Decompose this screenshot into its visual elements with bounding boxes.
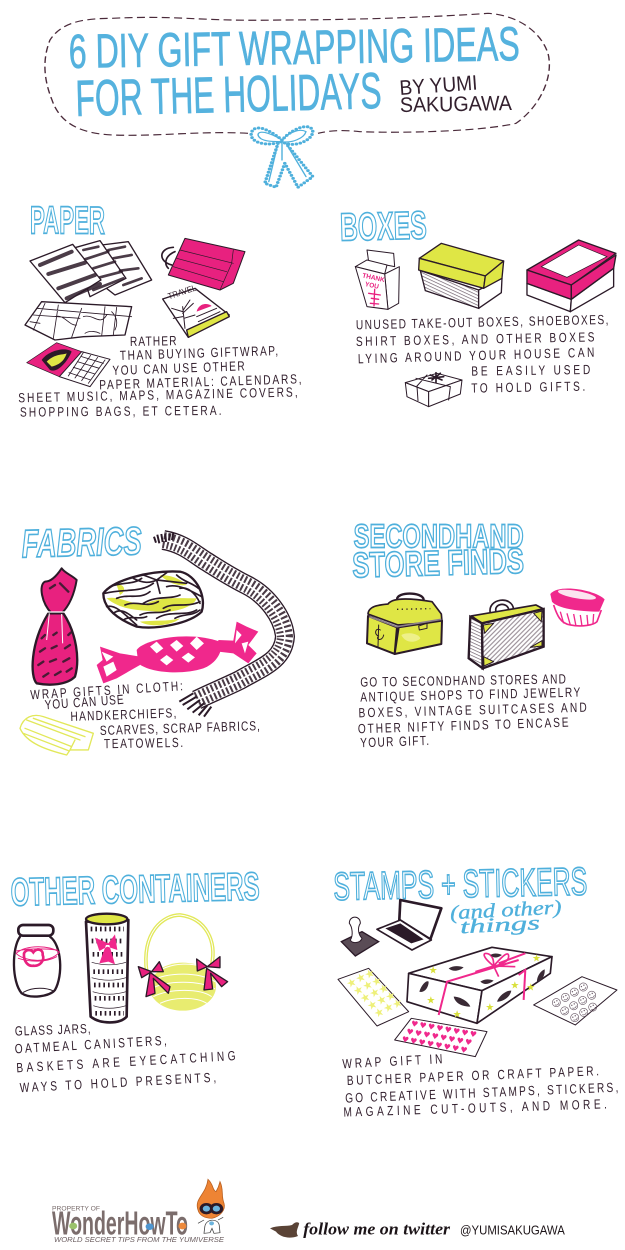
- text block: stamps: BUTCHER PAPER OR CRAFT PAPER.: [347, 1063, 599, 1088]
- byline: [399, 72, 512, 117]
- heading: fabrics: FABRICS: [21, 519, 142, 566]
- text block: other containers: OATMEAL CANISTERS,: [14, 1032, 167, 1057]
- illustration: yellow train case: [367, 594, 442, 654]
- illustration: smiley sticker sheet: [534, 977, 617, 1026]
- text block: fabrics: [30, 678, 260, 752]
- logo: WonderHowTo: [52, 1204, 225, 1244]
- text block: stamps: MAGAZINE CUT-OUTS, AND MORE.: [343, 1096, 607, 1120]
- illustration: take-out box: THANK: [362, 272, 385, 284]
- text block: stamps: WRAP GIFT IN: [342, 1051, 443, 1072]
- illustration: yellow tea towel: [20, 715, 93, 755]
- icon: blue ribbon bow: [251, 127, 313, 187]
- byline: SAKUGAWA: [400, 92, 512, 117]
- text block: fabrics: SCARVES, SCRAP FABRICS,: [100, 718, 260, 738]
- logo: WonderHowTo: WORLD SECRET TIPS FROM THE YUMIVERSE: [54, 1236, 225, 1244]
- illustration: travel magazine: [163, 283, 229, 337]
- illustration: yellow basket with bows: [138, 915, 228, 1011]
- icon: bird: [270, 1222, 299, 1238]
- illustration: yellow star sticker sheet: ★★★★★: [361, 965, 406, 1012]
- illustration: laptop: [377, 900, 441, 950]
- panel: other containers: [10, 865, 260, 1096]
- illustration: pink oval box: [550, 588, 605, 626]
- panel: secondhand store finds: [352, 518, 605, 751]
- byline: BY YUMI: [399, 72, 478, 100]
- illustration: wrapped gift with ribbon: [407, 947, 552, 1023]
- illustration: pink heart sticker sheet: ♥♥♥♥♥♥♥♥: [410, 1019, 479, 1040]
- panel: fabrics: [20, 519, 285, 755]
- text block: other containers: BASKETS ARE EYECATCHING: [16, 1048, 236, 1076]
- twitter follow line: @YUMISAKUGAWA: [460, 1224, 565, 1238]
- text block: paper: YOU CAN USE OTHER: [112, 358, 245, 378]
- illustration: pink shopping bag: [162, 238, 245, 290]
- text block: fabrics: HANDKERCHIEFS,: [70, 705, 177, 724]
- text block: other containers: [14, 1021, 236, 1096]
- illustration: pink heart sticker sheet: ♥♥♥♥♥♥♥♥: [401, 1035, 469, 1055]
- text block: other containers: WAYS TO HOLD PRESENTS,: [19, 1069, 216, 1096]
- illustration: folded map: [25, 302, 132, 340]
- dashed speech bubble outline: [45, 13, 549, 135]
- illustration: wrapped gift with ribbon: ★: [532, 954, 541, 965]
- illustration: wrapped gift with ribbon: ★: [453, 1009, 462, 1020]
- illustration: smiley sticker sheet: ☺☺☺☺: [558, 989, 600, 1019]
- illustration: pink box: [527, 240, 616, 312]
- illustration: calendar: [27, 343, 110, 387]
- text block: boxes upper: SHIRT BOXES, AND OTHER BOXES: [356, 329, 595, 349]
- illustration: yellow star sticker sheet: [338, 965, 409, 1026]
- text block: paper: THAN BUYING GIFTWRAP,: [120, 343, 278, 363]
- text block: boxes upper: LYING AROUND YOUR HOUSE CAN: [358, 344, 595, 367]
- text block: boxes upper: BE EASILY USED: [471, 362, 590, 379]
- heading: boxes: BOXES: [339, 203, 427, 250]
- illustration: take-out box: [355, 250, 399, 309]
- logo: WonderHowTo: WonderHowTo: [52, 1204, 188, 1242]
- illustration: grey suitcase: [469, 600, 544, 668]
- subheading: and other things: [449, 896, 563, 938]
- illustration: small gift box: [405, 373, 462, 407]
- text block: secondhand: BOXES, VINTAGE SUITCASES AND: [358, 699, 587, 721]
- text block: secondhand: OTHER NIFTY FINDS TO ENCASE: [358, 714, 569, 737]
- text block: secondhand: ANTIQUE SHOPS TO FIND JEWELRY: [360, 684, 581, 705]
- title banner: [45, 13, 549, 187]
- text block: secondhand: [358, 671, 587, 751]
- illustration: pink heart sticker sheet: ♥♥♥♥♥♥♥♥: [406, 1027, 474, 1048]
- twitter follow line: [303, 1220, 565, 1238]
- illustration: yellow and black wrapped cloth: [103, 571, 203, 628]
- illustration: oatmeal canister: [86, 914, 128, 1022]
- footer: [52, 1179, 565, 1244]
- heading: secondhand store finds: STORE FINDS: [352, 542, 524, 585]
- illustration: wrapped gift with ribbon: ★: [510, 980, 519, 991]
- text block: paper: SHEET MUSIC, MAPS, MAGAZINE COVERS,: [18, 384, 298, 406]
- illustration: smiley sticker sheet: ☺☺☺☺: [550, 981, 591, 1011]
- text block: fabrics: TEATOWELS.: [104, 735, 183, 752]
- text block: paper: RATHER: [130, 333, 177, 349]
- text block: fabrics: WRAP GIFTS IN CLOTH:: [30, 678, 183, 703]
- illustration: sheet music: [30, 241, 152, 303]
- subheading: and other things: (and other): [449, 896, 563, 924]
- illustration: yellow star sticker sheet: ★★★★★: [352, 969, 397, 1016]
- text block: fabrics: YOU CAN USE: [44, 691, 124, 713]
- subheading: and other things: things: [459, 912, 541, 938]
- heading: secondhand store finds: [352, 518, 524, 585]
- illustration: pink fabric sack: [33, 568, 77, 685]
- illustration: yellow star sticker sheet: ★★★★★: [343, 974, 388, 1021]
- illustration: yellow shoebox: [419, 243, 504, 308]
- panel: boxes: [339, 203, 616, 407]
- illustration: rubber stamp and ink pad: [341, 917, 379, 956]
- heading: secondhand store finds: SECONDHAND: [354, 518, 524, 555]
- illustration: wrapped gift with ribbon: ★: [429, 965, 438, 976]
- text block: paper: SHOPPING BAGS, ET CETERA.: [20, 403, 222, 420]
- icon: flame-haired mascot: [197, 1179, 224, 1233]
- text block: boxes upper: TO HOLD GIFTS.: [471, 378, 585, 396]
- illustration: take-out box: YOU: [364, 281, 380, 291]
- text block: secondhand: GO TO SECONDHAND STORES AND: [360, 671, 566, 690]
- panel: stamps and stickers: [333, 860, 619, 1120]
- illustration: wrapped gift with ribbon: ★: [426, 995, 435, 1006]
- text block: stamps: GO CREATIVE WITH STAMPS, STICKERS,: [345, 1079, 619, 1106]
- logo: WonderHowTo: PROPERTY OF: [52, 1204, 100, 1212]
- illustration: pink heart sticker sheet: [395, 1018, 487, 1057]
- panel: paper: [18, 198, 302, 420]
- text block: paper: PAPER MATERIAL: CALENDARS,: [99, 371, 302, 393]
- heading: paper: PAPER: [30, 198, 105, 242]
- main title line 2: FOR THE HOLIDAYS: [75, 62, 382, 127]
- text block: paper: [18, 333, 302, 420]
- illustration: wrapped gift with ribbon: ★: [526, 983, 535, 994]
- text block: boxes upper: [356, 312, 609, 396]
- illustration: wrapped gift with ribbon: ★: [485, 1003, 494, 1014]
- illustration: grey scarf: [154, 533, 285, 717]
- twitter follow line: follow me on twitter: [303, 1220, 451, 1238]
- text block: other containers: GLASS JARS,: [15, 1021, 91, 1039]
- illustration: pink candy-shaped wrap: [97, 622, 258, 683]
- text block: secondhand: YOUR GIFT.: [360, 733, 429, 751]
- text block: stamps: [342, 1051, 619, 1120]
- text block: boxes upper: UNUSED TAKE-OUT BOXES, SHOEBOXES,: [356, 312, 609, 333]
- illustration: travel magazine: TRAVEL: [167, 283, 198, 301]
- illustration: glass jar: [14, 925, 60, 997]
- illustration: smiley sticker sheet: ☺☺☺: [568, 1001, 601, 1026]
- heading: other containers: OTHER CONTAINERS: [10, 865, 260, 915]
